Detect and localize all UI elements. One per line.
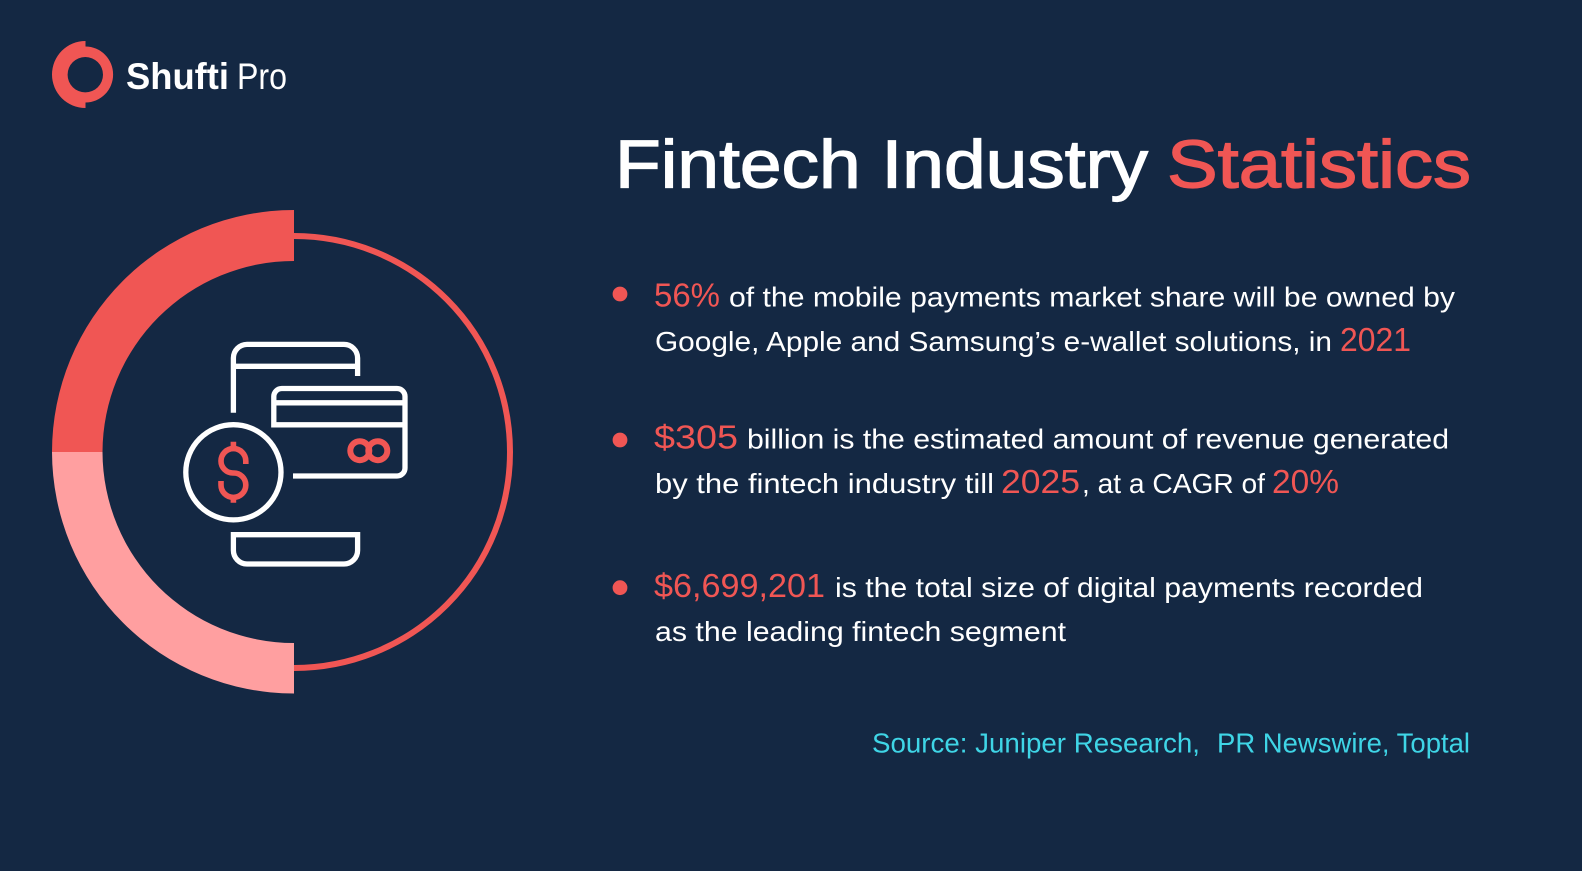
- bullet: mobile payments: 2021: [1340, 321, 1411, 358]
- bullet: fintech revenue: , at a CAGR of: [1082, 468, 1265, 499]
- icon: credit card: [274, 388, 405, 476]
- ring graphic: [52, 210, 510, 694]
- title: Fintech Industry: [615, 127, 1148, 203]
- icon: phone, card and dollar coin: [186, 344, 405, 564]
- title: [615, 127, 1471, 203]
- thick red arc: [52, 210, 294, 452]
- bullet: mobile payments: [613, 277, 1455, 358]
- source note: PR Newswire, Toptal: [1217, 728, 1470, 759]
- bullet: mobile payments: of the mobile payments market share will be owned by: [729, 282, 1455, 313]
- title: Statistics: [1167, 127, 1471, 203]
- bullet: fintech revenue: [613, 418, 1449, 500]
- logo wordmark: [126, 56, 287, 97]
- icon: phone bottom: [233, 535, 358, 564]
- logo wordmark: Pro: [237, 56, 287, 97]
- bullet: fintech revenue: 2025: [1001, 463, 1080, 500]
- bullet: fintech revenue: $305: [654, 418, 738, 456]
- icon: card infinity symbol: [350, 441, 387, 460]
- bullet: fintech revenue: by the fintech industry till: [655, 468, 994, 499]
- icon: phone top: [233, 344, 358, 413]
- source note: Source: Juniper Research,: [872, 728, 1200, 759]
- logo wordmark: Shufti: [126, 56, 229, 97]
- bullet: digital payments: is the total size of digital payments recorded: [835, 572, 1423, 603]
- source note: [872, 728, 1470, 759]
- bullet: mobile payments: 56%: [654, 277, 720, 314]
- logo: Shufti Pro: [52, 41, 287, 108]
- icon: coin: [186, 425, 281, 520]
- bullet: digital payments: as the leading fintech segment: [655, 616, 1066, 647]
- bullet: fintech revenue: 20%: [1272, 463, 1339, 500]
- bullet: digital payments: [613, 567, 1423, 647]
- bullet: digital payments: $6,699,201: [654, 567, 825, 604]
- thin ring arc: [294, 236, 510, 668]
- icon: dollar sign: [221, 442, 246, 503]
- icon: logo ring: [52, 41, 113, 108]
- bullet: mobile payments: Google, Apple and Samsung’s e-wallet solutions, in: [655, 326, 1332, 357]
- bullet: fintech revenue: billion is the estimated amount of revenue generated: [747, 424, 1449, 454]
- thick pink arc: [52, 452, 294, 694]
